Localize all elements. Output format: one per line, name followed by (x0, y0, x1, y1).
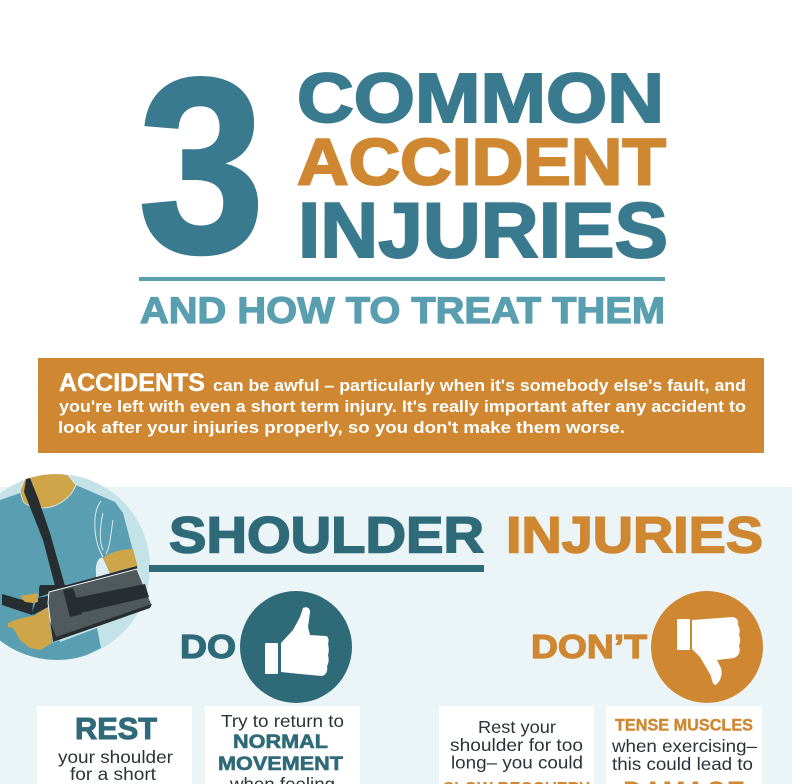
banner lead word: ACCIDENTS (59, 369, 205, 397)
card background (439, 706, 594, 784)
sling lower edge (50, 604, 152, 642)
card: rest (37, 706, 192, 784)
panel: shoulder injuries (0, 474, 792, 784)
sling top border (39, 566, 138, 597)
forearm skin (103, 549, 138, 573)
clipped figure (0, 474, 138, 668)
illustration: arm in sling (0, 474, 152, 668)
thumb cuff (265, 643, 278, 674)
icon: thumbs up (240, 591, 352, 703)
panel background (0, 487, 792, 784)
card heading: TENSE MUSCLES (615, 716, 753, 734)
card: normal movement (205, 706, 360, 784)
waist strap (2, 594, 33, 615)
banner line 3: look after your injuries properly, so you don't make them worse. (58, 418, 625, 437)
card text 1: Rest your (478, 717, 556, 737)
card heading: REST (75, 711, 157, 746)
do circle (240, 591, 352, 703)
card text 3: long– you could (451, 752, 583, 772)
card background (37, 706, 192, 784)
title rule (139, 277, 665, 281)
heading: shoulder: SHOULDER (169, 506, 484, 564)
sling body (48, 569, 152, 642)
banner line 1: can be awful – particularly when it's somebody else's fault, and (213, 376, 746, 395)
sling strap (24, 478, 65, 586)
heading underline (149, 565, 484, 572)
subtitle: AND HOW TO TREAT THEM (140, 290, 665, 331)
backdrop circle (0, 474, 150, 660)
torso and sleeve (0, 485, 137, 668)
thumb hand (692, 617, 740, 685)
thumb hand (281, 607, 329, 676)
sling vertical band (63, 588, 82, 617)
icon: thumbs down (651, 591, 763, 703)
sling horizontal band (75, 584, 149, 613)
banner line 2: you're left with even a short term injury. It's really important after any accident to (59, 397, 746, 416)
banner background (38, 358, 764, 453)
underarm patch (96, 558, 110, 578)
heading: injuries: INJURIES (506, 506, 763, 564)
card text 2: for a short (70, 764, 156, 784)
card text 2: shoulder for too (450, 735, 583, 755)
card emphasis 1: NORMAL (233, 732, 328, 753)
hand (8, 607, 52, 650)
card: rest too long (439, 706, 594, 784)
title line: common: COMMON (297, 59, 664, 137)
neck skin (20, 474, 76, 508)
title line: accident: ACCIDENT (297, 124, 666, 198)
title block (138, 26, 668, 331)
dont label: DON’T (531, 628, 647, 665)
card text 1: Try to return to (221, 711, 344, 731)
card background (205, 706, 360, 784)
dont circle (651, 591, 763, 703)
big numeral 3: 3 (138, 26, 265, 305)
do label: DO (180, 628, 236, 665)
buckle (32, 596, 48, 615)
card emphasis 2: MOVEMENT (218, 753, 343, 775)
title line: injuries: INJURIES (298, 186, 668, 274)
card text 1: your shoulder (58, 747, 173, 767)
card background (606, 706, 762, 784)
thumb (20, 593, 38, 603)
thumb cuff (677, 619, 690, 650)
card text 1: when exercising– (611, 736, 757, 756)
card: tense muscles (606, 706, 762, 784)
card text 2: this could lead to (612, 754, 753, 774)
shirt fold lines (95, 501, 113, 557)
intro banner (38, 358, 764, 453)
